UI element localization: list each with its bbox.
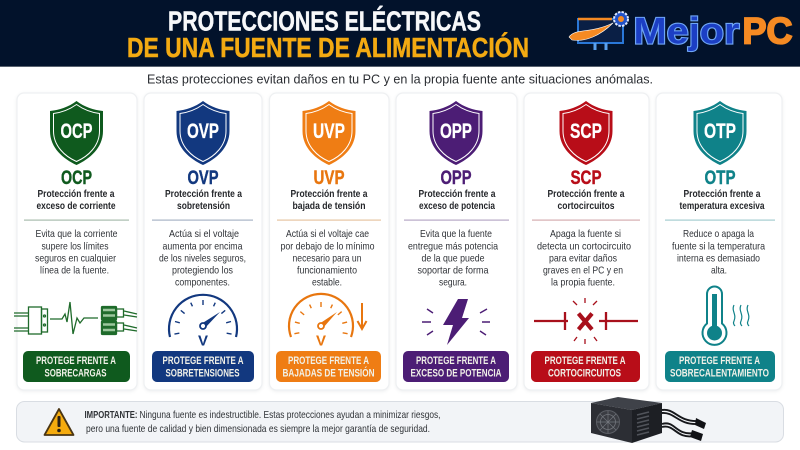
title: DE UNA FUENTE DE ALIMENTACIÓN [127, 32, 529, 63]
heading: OPP: Protección frente a [418, 189, 496, 200]
panel: OVP [144, 93, 262, 390]
heading: OVP: Protección frente a [165, 189, 242, 200]
description: OCP: línea de la fuente. [40, 264, 109, 276]
callout text: Ninguna fuente es indestructible. Estas protecciones ayudan a minimizar riesgos, [140, 409, 440, 421]
icon: voltage gauge: V [198, 332, 208, 350]
button: OTP [665, 351, 775, 382]
description: OCP: seguros en cualquier [35, 252, 116, 264]
heading: SCP: cortocircuitos [558, 201, 615, 212]
button: OCP: PROTEGE FRENTE A [36, 355, 116, 367]
label: OCP: OCP [61, 168, 92, 189]
callout: important note [16, 397, 784, 443]
shield: OPP: OPP [440, 120, 472, 143]
button: SCP [531, 351, 640, 382]
description: OVP: de los niveles seguros, [159, 252, 246, 264]
description: UVP: por debajo de lo mínimo [280, 240, 375, 252]
button: OVP: SOBRETENSIONES [166, 368, 240, 380]
icon: power supply unit [591, 397, 706, 443]
shield: UVP [302, 101, 356, 165]
logo: MejorPC: PC [742, 10, 792, 52]
button: UVP [276, 351, 381, 382]
icon: voltage gauge [169, 295, 237, 350]
description: OPP: de la que puede [422, 252, 485, 264]
description: OTP: fuente si la temperatura [672, 240, 765, 252]
button: SCP: CORTOCIRCUITOS [548, 368, 621, 380]
description: OTP: alta. [711, 264, 727, 276]
subtitle: Estas protecciones evitan daños en tu PC y en la propia fuente ante situaciones anómalas. [147, 72, 653, 86]
heading: OPP [418, 189, 496, 212]
callout text: pero una fuente de calidad y bien dimensionada es siempre la mejor garantía de seguridad. [86, 423, 430, 435]
logo: MejorPC [569, 10, 792, 52]
panel: SCP [524, 93, 649, 390]
button: OPP: EXCESO DE POTENCIA [410, 368, 502, 380]
shield: UVP: UVP [313, 120, 345, 143]
description: OCP: Evita que la corriente [36, 228, 118, 240]
description: OVP: aumenta por encima [162, 240, 243, 252]
description: UVP: Actúa si el voltaje cae [286, 228, 369, 240]
description: OPP: soportar de forma [418, 264, 489, 276]
shield: SCP [560, 101, 612, 165]
heading: OTP: Protección frente a [684, 189, 761, 200]
heading: UVP: bajada de tensión [292, 201, 366, 212]
callout text: IMPORTANTE: [84, 409, 138, 421]
panel: UVP [270, 93, 389, 390]
button: OPP [403, 351, 509, 382]
shield: SCP: SCP [570, 120, 602, 143]
shield: OTP [694, 101, 746, 165]
description: OVP [159, 228, 246, 288]
description: OPP [408, 228, 498, 288]
icon: lightning bolt [422, 299, 490, 345]
shield: OPP [430, 101, 482, 165]
heading: OCP: Protección frente a [38, 189, 115, 200]
description: UVP: estable. [312, 276, 342, 288]
heading: OVP: sobretensión [177, 201, 230, 212]
description: OPP: Evita que la fuente [420, 228, 492, 240]
icon: connectors and current spike [14, 302, 137, 334]
heading: SCP [548, 189, 625, 212]
shield: OCP [50, 101, 103, 165]
button: OVP: PROTEGE FRENTE A [162, 355, 244, 367]
description: OCP [35, 228, 118, 276]
shield: OVP: OVP [187, 120, 219, 143]
description: OCP: supere los límites [42, 240, 108, 252]
button: OTP: SOBRECALENTAMIENTO [670, 368, 769, 380]
callout text [84, 409, 440, 435]
label: UVP: UVP [314, 168, 345, 189]
button: SCP: PROTEGE FRENTE A [544, 355, 626, 367]
shield: OCP: OCP [60, 120, 92, 143]
description: OTP [672, 228, 765, 276]
description: SCP [537, 228, 631, 288]
heading: SCP: Protección frente a [548, 189, 625, 200]
panel: OTP [656, 93, 782, 390]
shield: OVP [176, 101, 230, 165]
label: SCP: SCP [570, 168, 602, 189]
panel: OCP [14, 93, 137, 390]
button: OCP: SOBRECARGAS [44, 368, 106, 380]
description: OTP: interna es demasiado [677, 252, 760, 264]
icon: short circuit [534, 298, 638, 344]
icon: warning triangle [44, 409, 74, 435]
icon: low voltage gauge with down arrow: V [316, 332, 326, 350]
heading: OVP [165, 189, 242, 212]
button: OCP [23, 351, 130, 382]
shield: OTP: OTP [704, 120, 736, 143]
description: OVP: componentes. [175, 276, 230, 288]
description: OVP: protegiendo los [172, 264, 233, 276]
description: UVP: necesario para un [292, 252, 362, 264]
heading: OTP [680, 189, 765, 212]
logo: MejorPC: Mejor [634, 10, 740, 52]
heading: OCP: exceso de corriente [36, 201, 116, 212]
button: UVP: BAJADAS DE TENSIÓN [282, 366, 375, 380]
description: SCP: la propia fuente. [551, 276, 615, 288]
icon: thermometer [703, 286, 749, 345]
description: OPP: segura. [439, 276, 467, 288]
button: UVP: PROTEGE FRENTE A [288, 355, 369, 367]
title: PROTECCIONES ELÉCTRICAS [168, 6, 481, 36]
button: OVP [152, 351, 254, 382]
label: OTP: OTP [704, 168, 736, 189]
heading: OTP: temperatura excesiva [680, 201, 765, 212]
button: OTP: PROTEGE FRENTE A [679, 355, 760, 367]
description: SCP: para evitar daños [549, 252, 617, 264]
panel: OPP [396, 93, 517, 390]
title [127, 6, 529, 63]
heading: OPP: exceso de potencia [419, 201, 495, 212]
description: SCP: graves en el PC y en [543, 264, 623, 276]
description: OPP: entregue más potencia [408, 240, 498, 252]
heading: OCP [36, 189, 116, 212]
header band [0, 0, 800, 67]
description: SCP: Apaga la fuente si [550, 228, 621, 240]
description: UVP [280, 228, 375, 288]
description: OVP: Actúa si el voltaje [169, 228, 239, 240]
button: OPP: PROTEGE FRENTE A [416, 355, 496, 367]
heading: UVP [290, 189, 368, 212]
description: UVP: funcionamiento [297, 264, 357, 276]
label: OPP: OPP [440, 168, 472, 189]
icon: low voltage gauge with down arrow [289, 294, 366, 350]
label: OVP: OVP [188, 168, 219, 189]
heading: UVP: Protección frente a [290, 189, 368, 200]
description: SCP: detecta un cortocircuito [537, 240, 631, 252]
description: OTP: Reduce o apaga la [683, 228, 754, 240]
